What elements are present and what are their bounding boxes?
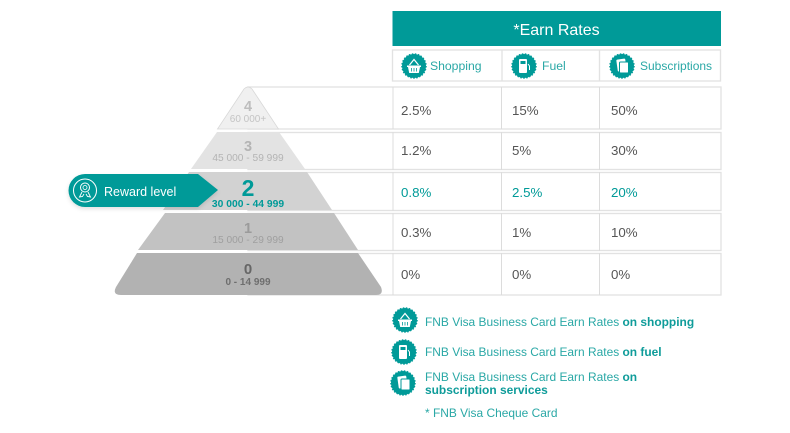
row: level 4 rates xyxy=(248,87,721,129)
row: level 1 rates: 0.3% xyxy=(401,225,431,240)
rates table xyxy=(248,87,721,295)
label: subscriptions: Subscriptions xyxy=(640,59,712,73)
row: level 2 rates: 2.5% xyxy=(512,185,542,200)
tier 1: 1 xyxy=(244,221,252,237)
icon: rosette xyxy=(74,179,96,202)
row: level 2 rates: 0.8% xyxy=(401,185,431,200)
footnote: * FNB Visa Cheque Card xyxy=(425,406,557,420)
tier 2 xyxy=(163,172,332,210)
row: level 1 rates: 1% xyxy=(512,225,531,240)
tier 2: 30 000 - 44 999 xyxy=(212,199,284,210)
legend: subscriptions xyxy=(391,370,637,397)
row: level 0 rates xyxy=(248,253,721,295)
row: level 3 rates: 30% xyxy=(611,143,638,158)
legend: fuel xyxy=(392,340,662,364)
tier 0: 0 xyxy=(244,261,252,278)
tier 4: 4 xyxy=(244,99,252,115)
row: level 1 rates xyxy=(248,213,721,251)
tier 2: 2 xyxy=(242,175,254,201)
label: shopping: Shopping xyxy=(430,59,482,73)
legend xyxy=(391,308,694,420)
legend: fuel: FNB Visa Business Card Earn Rates on fuel xyxy=(425,345,662,359)
legend: shopping: FNB Visa Business Card Earn Rates on shopping xyxy=(425,315,694,329)
row: level 4 rates: 15% xyxy=(512,103,539,118)
row: level 1 rates: 10% xyxy=(611,225,638,240)
pyramid xyxy=(115,87,382,295)
reward level tag xyxy=(69,174,218,207)
tier 3 xyxy=(191,132,305,169)
tier 0 xyxy=(115,253,382,295)
label: fuel: Fuel xyxy=(542,59,566,73)
icon: fuel pump xyxy=(512,54,536,78)
legend: subscriptions: FNB Visa Business Card Earn Rates on xyxy=(425,370,637,384)
row: level 3 rates: 1.2% xyxy=(401,143,431,158)
earn rates header xyxy=(392,11,721,46)
row: level 2 rates: 20% xyxy=(611,185,638,200)
tier 3: 3 xyxy=(244,139,252,155)
tier 1 xyxy=(138,213,358,250)
tier 4 xyxy=(218,87,278,129)
tier 3: 45 000 - 59 999 xyxy=(212,153,284,164)
row: level 3 rates: 5% xyxy=(512,143,531,158)
row: level 4 rates: 50% xyxy=(611,103,638,118)
tier 0: 0 - 14 999 xyxy=(225,277,271,288)
tier 1: 15 000 - 29 999 xyxy=(212,235,284,246)
row: level 0 rates: 0% xyxy=(512,267,531,282)
row: level 0 rates: 0% xyxy=(611,267,630,282)
icon: subscriptions xyxy=(610,54,634,78)
legend: subscriptions: subscription services xyxy=(425,383,548,397)
row: level 0 rates: 0% xyxy=(401,267,420,282)
label: Reward level xyxy=(104,185,176,199)
legend: shopping xyxy=(393,308,694,332)
category header row xyxy=(392,50,720,81)
row: level 4 rates: 2.5% xyxy=(401,103,431,118)
tier 4: 60 000+ xyxy=(230,114,266,125)
row: level 2 rates xyxy=(248,172,721,211)
icon: shopping basket xyxy=(402,54,426,78)
earn rates header: *Earn Rates xyxy=(513,22,600,39)
row: level 3 rates xyxy=(248,132,721,170)
